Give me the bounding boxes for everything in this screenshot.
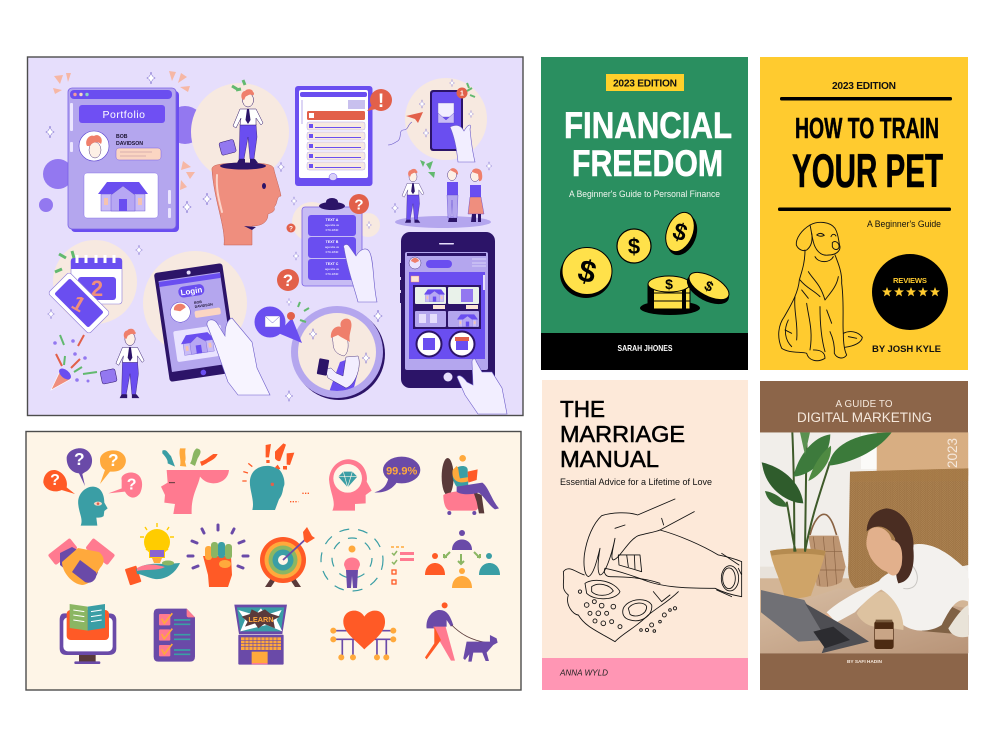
contact rows: agenda.us [325, 223, 340, 227]
dog line drawing [779, 222, 862, 361]
icon: laptop with learn burst [234, 605, 287, 665]
author name: ANNA WYLD [559, 668, 608, 678]
contact rows: 070-1840 [326, 272, 339, 276]
profile name: BOB [116, 134, 128, 140]
book title: THE [560, 396, 605, 422]
contact rows: TEXT A [326, 218, 339, 222]
phone with email and paper plane: 1 [460, 90, 464, 98]
edition badge [606, 74, 684, 91]
question bubble [277, 269, 299, 291]
contact clipboard with hand: ? [354, 196, 364, 214]
book cover: How to Train Your Pet [760, 57, 968, 370]
gold coins: $ [669, 217, 691, 248]
man standing on open head [191, 80, 289, 245]
book title: DIGITAL MARKETING [797, 410, 932, 425]
profile name: DAVIDSON [116, 141, 143, 147]
icon: person in radiating circle with checklist [321, 529, 414, 591]
profile name [116, 134, 143, 147]
calendar illustration: 2 [91, 276, 103, 301]
hands line drawing [563, 499, 742, 642]
icon: organisation chart [425, 530, 500, 588]
book subtitle: Essential Advice for a Lifetime of Love [560, 477, 712, 488]
login tablet with hand: DAVIDSON [194, 302, 214, 309]
icon: head with question bubbles: ? [50, 472, 60, 489]
portfolio window illustration [39, 71, 204, 232]
icon: target with arrow [260, 527, 315, 587]
book title: MANUAL [560, 446, 659, 472]
icon: open head with arrows [161, 448, 229, 514]
book title [792, 113, 943, 197]
book title: MARRIAGE [560, 421, 685, 447]
login pill: Login [180, 285, 203, 297]
profile avatar [79, 131, 109, 161]
gold coins: $ [702, 277, 716, 295]
contact clipboard with hand: ? [289, 226, 293, 232]
portfolio header [79, 105, 165, 123]
cover photo: woman with laptop [760, 432, 968, 653]
contact rows: 070-1840 [326, 228, 339, 232]
author name: SARAH JHONES [618, 343, 673, 353]
login tablet with hand [143, 251, 270, 395]
contact rows [308, 215, 356, 280]
gold coins: $ [574, 252, 600, 291]
contact rows: TEXT B [326, 240, 339, 244]
book title: A GUIDE TO [836, 399, 893, 410]
icon: laptop with learn burst: LEARN [248, 615, 274, 624]
book subtitle: A Beginner's Guide to Personal Finance [569, 189, 720, 200]
vertical year: 2023 [944, 438, 960, 468]
contact clipboard with hand [286, 194, 380, 302]
calendar illustration [48, 240, 137, 334]
book title [564, 105, 732, 184]
author name: BY SAFI HADIN [847, 659, 883, 665]
big phone app screen [400, 232, 507, 414]
icon: heart with connected nodes [330, 611, 396, 660]
calendar illustration: 1 [67, 291, 89, 317]
icon: checklist document [154, 609, 195, 662]
man with briefcase [100, 329, 144, 398]
contact rows: agenda.us [325, 245, 340, 249]
gold coins [560, 208, 734, 315]
reviews badge [872, 254, 948, 330]
book title [560, 396, 685, 472]
login tablet with hand: BOB [194, 300, 203, 305]
gold coins: $ [665, 276, 673, 292]
woman with phone in circle [291, 306, 385, 400]
icon: head with question bubbles: ? [74, 449, 85, 469]
icon: head with question bubbles: ? [108, 450, 119, 470]
gold coins: $ [628, 234, 640, 259]
notification tablet [295, 86, 372, 186]
reviews badge: REVIEWS [893, 276, 927, 285]
icon: person reading on chair [442, 455, 499, 515]
alert bubble [367, 89, 392, 112]
portfolio header: Portfolio [102, 109, 146, 121]
panel: purple illustration set [28, 57, 523, 416]
panel: flat icon set [26, 432, 521, 690]
icon: book on monitor [60, 604, 116, 664]
icon: person walking dog [425, 602, 498, 662]
icon: hand holding light bulb [125, 523, 180, 585]
edition label: 2023 EDITION [832, 81, 896, 92]
author name: BY JOSH KYLE [872, 344, 941, 355]
book title [797, 399, 932, 425]
contact rows: agenda.us [325, 267, 340, 271]
icon: diamond head with 99.9 percent bubble: 99.9% [386, 465, 417, 477]
book title: FREEDOM [572, 143, 723, 184]
party popper and confetti [51, 335, 97, 390]
book title: FINANCIAL [564, 105, 732, 146]
book cover: Digital Marketing [760, 381, 968, 690]
edition badge: 2023 EDITION [613, 78, 677, 90]
contact rows: TEXT C [326, 262, 339, 266]
phone with email and paper plane [388, 78, 487, 162]
portfolio canvas [25, 56, 968, 691]
alert bubble: ! [378, 91, 384, 112]
email bubble [254, 302, 309, 343]
three people talking [392, 160, 492, 228]
icon: diamond head with 99.9 percent bubble [275, 443, 420, 511]
book cover: The Marriage Manual [542, 380, 748, 690]
book cover: Financial Freedom [541, 57, 748, 370]
icon: head with question bubbles: ? [127, 476, 137, 493]
icon: head with question bubbles [43, 448, 142, 526]
book subtitle: A Beginner's Guide [867, 219, 941, 229]
question bubble: ? [283, 271, 293, 290]
icon: raised fist [188, 525, 248, 587]
contact rows: 070-1840 [326, 250, 339, 254]
icon: thinking head with exclamation marks [242, 444, 284, 510]
icon: handshake [48, 538, 115, 585]
